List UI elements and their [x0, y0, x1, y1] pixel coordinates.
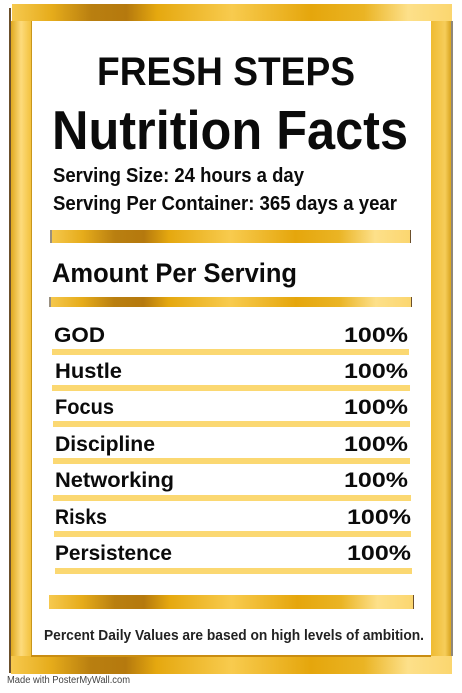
gold divider middle	[49, 297, 412, 307]
row: GOD: GOD	[54, 323, 105, 347]
row: Focus: Focus	[55, 395, 114, 419]
footnote: Percent Daily Values are based on high levels of ambition.	[44, 628, 424, 644]
nutrient rows	[52, 323, 412, 574]
row: Focus: 100%	[344, 396, 408, 419]
heading: Amount Per Serving: Amount Per Serving	[52, 258, 297, 288]
row: Focus	[53, 395, 410, 427]
serving size: Serving Size: 24 hours a day	[53, 164, 305, 187]
row: Networking	[53, 468, 411, 501]
gold divider top	[50, 230, 411, 243]
row: Discipline: 100%	[344, 433, 408, 456]
row: Hustle: Hustle	[55, 359, 122, 383]
title: FRESH STEPS: FRESH STEPS	[97, 50, 355, 94]
row: Hustle	[52, 359, 410, 391]
white panel	[32, 21, 431, 655]
row: Risks: Risks	[55, 505, 107, 529]
serving per container: Serving Per Container: 365 days a year	[53, 192, 397, 215]
watermark: Made with PosterMyWall.com	[7, 675, 130, 686]
row: Risks: 100%	[347, 506, 411, 529]
row: Networking: Networking	[55, 468, 174, 492]
row: Persistence: Persistence	[55, 541, 172, 565]
row: GOD	[52, 323, 409, 355]
row: Risks	[54, 505, 411, 537]
row: Hustle: 100%	[344, 360, 408, 383]
row: Persistence	[55, 541, 412, 574]
gold divider bottom	[49, 595, 414, 609]
row: Persistence: 100%	[347, 542, 411, 565]
row: Discipline: Discipline	[55, 432, 155, 456]
heading: Nutrition Facts: Nutrition Facts	[52, 99, 408, 161]
row: Discipline	[53, 432, 410, 464]
row: GOD: 100%	[344, 324, 408, 347]
row: Networking: 100%	[344, 469, 408, 492]
